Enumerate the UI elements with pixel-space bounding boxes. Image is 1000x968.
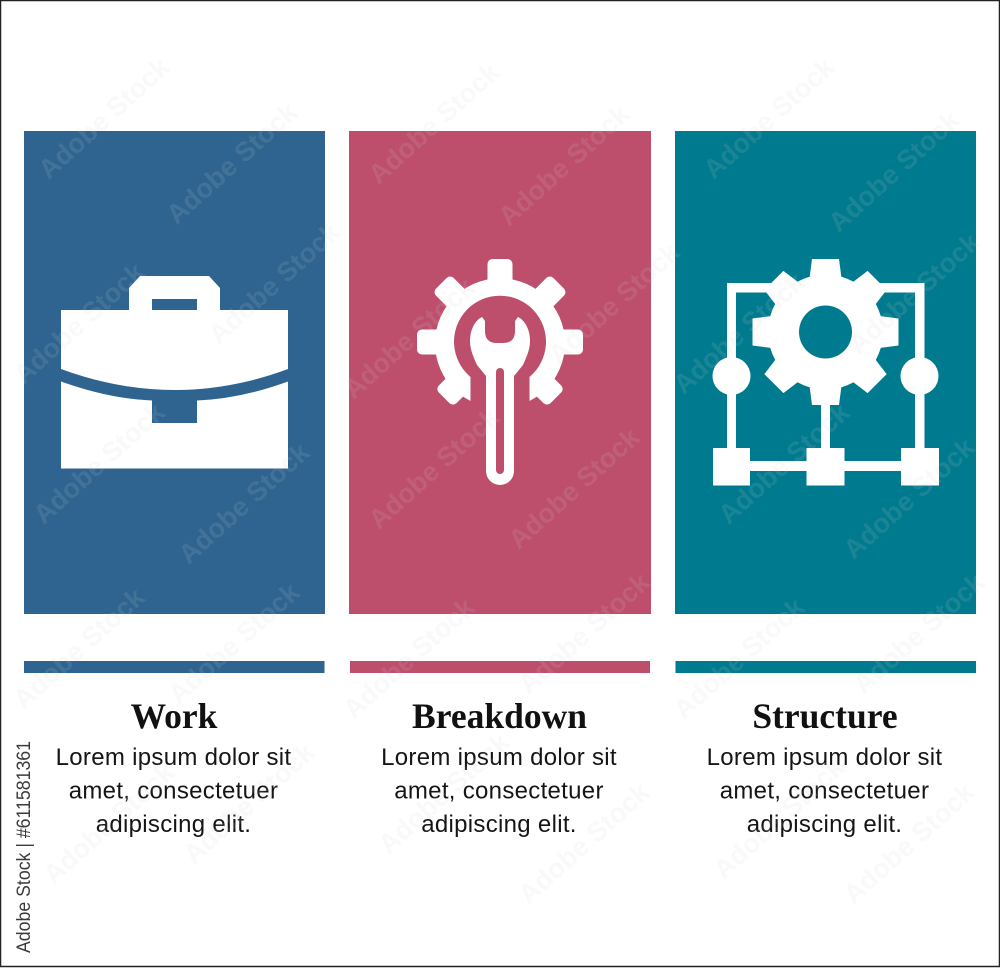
panel: work	[24, 131, 325, 614]
watermark pattern: Adobe Stock	[513, 776, 656, 910]
gear ring	[435, 278, 565, 401]
watermark pattern: Adobe Stock	[843, 226, 986, 360]
text block: breakdown: adipiscing elit.	[421, 811, 577, 838]
icon: gear network	[712, 259, 939, 486]
watermark pattern: Adobe Stock	[173, 436, 316, 570]
panel: structure	[675, 131, 976, 614]
watermark pattern: Adobe Stock	[823, 104, 966, 238]
text block: breakdown: Lorem ipsum dolor sit	[381, 744, 617, 771]
text block: structure: amet, consectetuer	[720, 778, 929, 804]
wrench	[470, 317, 530, 485]
watermark pattern: Adobe Stock	[338, 271, 481, 405]
text block: work: Lorem ipsum dolor sit	[56, 744, 291, 771]
watermark pattern: Adobe Stock	[848, 566, 991, 700]
watermark pattern: Adobe Stock	[493, 98, 636, 232]
gear	[752, 259, 898, 405]
gear teeth	[417, 259, 583, 407]
accent bar: structure	[676, 661, 976, 673]
watermark pattern: Adobe Stock	[163, 576, 306, 710]
stock id label: Adobe Stock | #611581361	[14, 741, 35, 953]
watermark pattern: Adobe Stock	[38, 756, 181, 890]
text block: work: adipiscing elit.	[96, 811, 251, 838]
watermark pattern: Adobe Stock	[503, 421, 646, 555]
watermark pattern: Adobe Stock	[838, 776, 981, 910]
watermark pattern: Adobe Stock	[8, 256, 151, 390]
watermark pattern: Adobe Stock	[363, 56, 506, 190]
panel: breakdown	[349, 131, 651, 614]
node squares	[713, 448, 750, 486]
accent bar: work	[24, 661, 324, 673]
watermark pattern: Adobe Stock	[33, 51, 176, 185]
watermark pattern: Adobe Stock	[363, 401, 506, 535]
watermark pattern: Adobe Stock	[28, 396, 171, 530]
watermark pattern: Adobe Stock	[178, 736, 321, 870]
watermark pattern: Adobe Stock	[708, 751, 851, 885]
heading: structure: Structure	[752, 696, 898, 736]
icon: gear and wrench	[417, 259, 583, 485]
accent bar: breakdown	[350, 661, 650, 673]
watermark pattern: Adobe Stock	[8, 581, 151, 715]
watermark pattern: Adobe Stock	[713, 396, 856, 530]
text block: structure: Lorem ipsum dolor sit	[707, 744, 942, 771]
node circles	[712, 357, 750, 395]
watermark pattern: Adobe Stock	[338, 591, 481, 725]
heading: work: Work	[131, 696, 218, 736]
watermark pattern: Adobe Stock	[668, 591, 811, 725]
text block: breakdown: amet, consectetuer	[394, 778, 604, 804]
heading: breakdown: Breakdown	[412, 696, 587, 736]
watermark pattern: Adobe Stock	[161, 96, 304, 230]
text block: structure: adipiscing elit.	[747, 811, 902, 838]
connector lines	[727, 283, 924, 471]
watermark pattern: Adobe Stock	[838, 431, 981, 565]
icon: briefcase	[61, 276, 288, 468]
watermark pattern: Adobe Stock	[698, 51, 841, 185]
watermark pattern: Adobe Stock	[203, 216, 346, 350]
text block: work: amet, consectetuer	[69, 778, 278, 804]
watermark pattern: Adobe Stock	[373, 726, 516, 860]
watermark pattern: Adobe Stock	[543, 236, 686, 370]
watermark pattern: Adobe Stock	[513, 566, 656, 700]
watermark pattern: Adobe Stock	[668, 266, 811, 400]
